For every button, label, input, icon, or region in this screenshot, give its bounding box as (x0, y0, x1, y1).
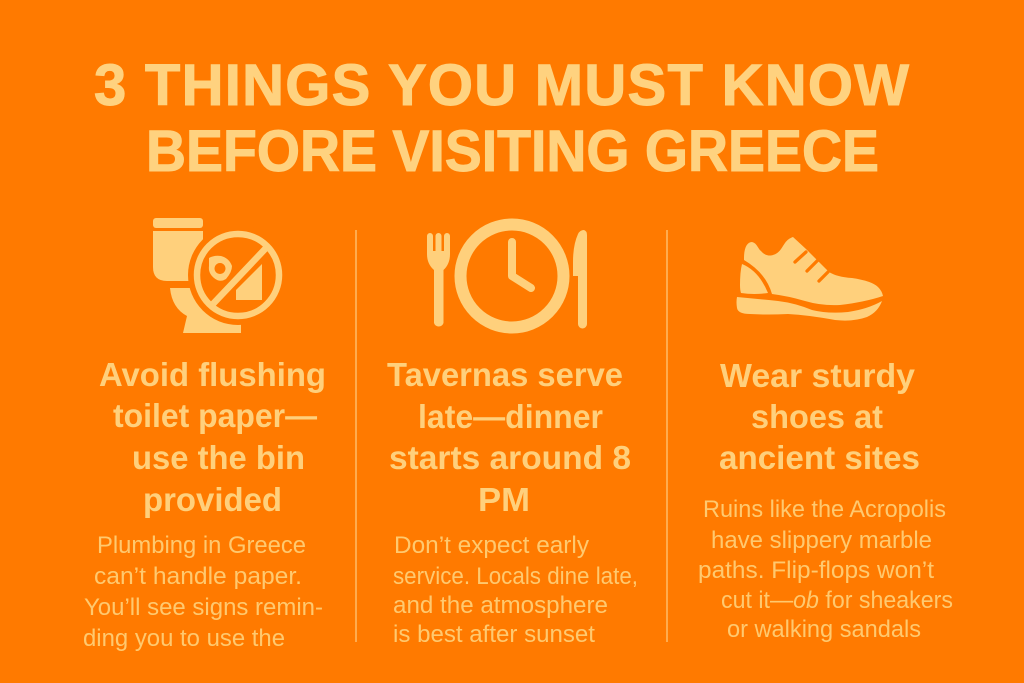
body text: can’t handle paper. (94, 563, 302, 590)
icon: sneaker (736, 237, 883, 321)
panel: dinner time tip (387, 224, 638, 648)
body text (83, 532, 323, 652)
body text: cut it—ob for sheakers (721, 587, 953, 614)
heading: late—dinner (418, 398, 603, 435)
icon: clock plate with fork and knife (427, 224, 587, 328)
title: BEFORE VISITING GREECE (146, 119, 879, 184)
panel: sturdy shoes tip (698, 237, 953, 643)
body text: or walking sandals (727, 616, 921, 643)
panel: toilet paper tip (83, 218, 326, 652)
body text: You’ll see signs remin- (84, 594, 323, 621)
body text: Plumbing in Greece (97, 532, 306, 559)
heading (387, 356, 631, 518)
title: 3 THINGS YOU MUST KNOW (94, 53, 909, 118)
heading (719, 357, 920, 476)
body text: Don’t expect early (394, 532, 589, 559)
body text (698, 496, 953, 643)
heading: provided (143, 481, 282, 518)
body text: and the atmosphere (393, 592, 608, 619)
body text: paths. Flip-flops won’t (698, 557, 934, 584)
heading: starts around 8 (389, 439, 631, 476)
body text: Ruins like the Acropolis (703, 496, 946, 523)
body text (393, 532, 638, 648)
heading: Wear sturdy (720, 357, 916, 394)
heading: use the bin (132, 439, 305, 476)
heading: toilet paper— (113, 397, 317, 434)
body text: is best after sunset (393, 621, 595, 648)
heading: shoes at (751, 398, 883, 435)
heading: Tavernas serve (387, 356, 623, 393)
body text: ding you to use the (83, 625, 285, 652)
heading: PM (478, 481, 530, 518)
body text: service. Locals dine late, (393, 563, 638, 590)
heading: ancient sites (719, 439, 920, 476)
heading (99, 356, 326, 518)
icon: no toilet paper in toilet (153, 218, 288, 333)
body text: have slippery marble (711, 527, 932, 554)
heading: Avoid flushing (99, 356, 326, 393)
title (94, 53, 909, 184)
